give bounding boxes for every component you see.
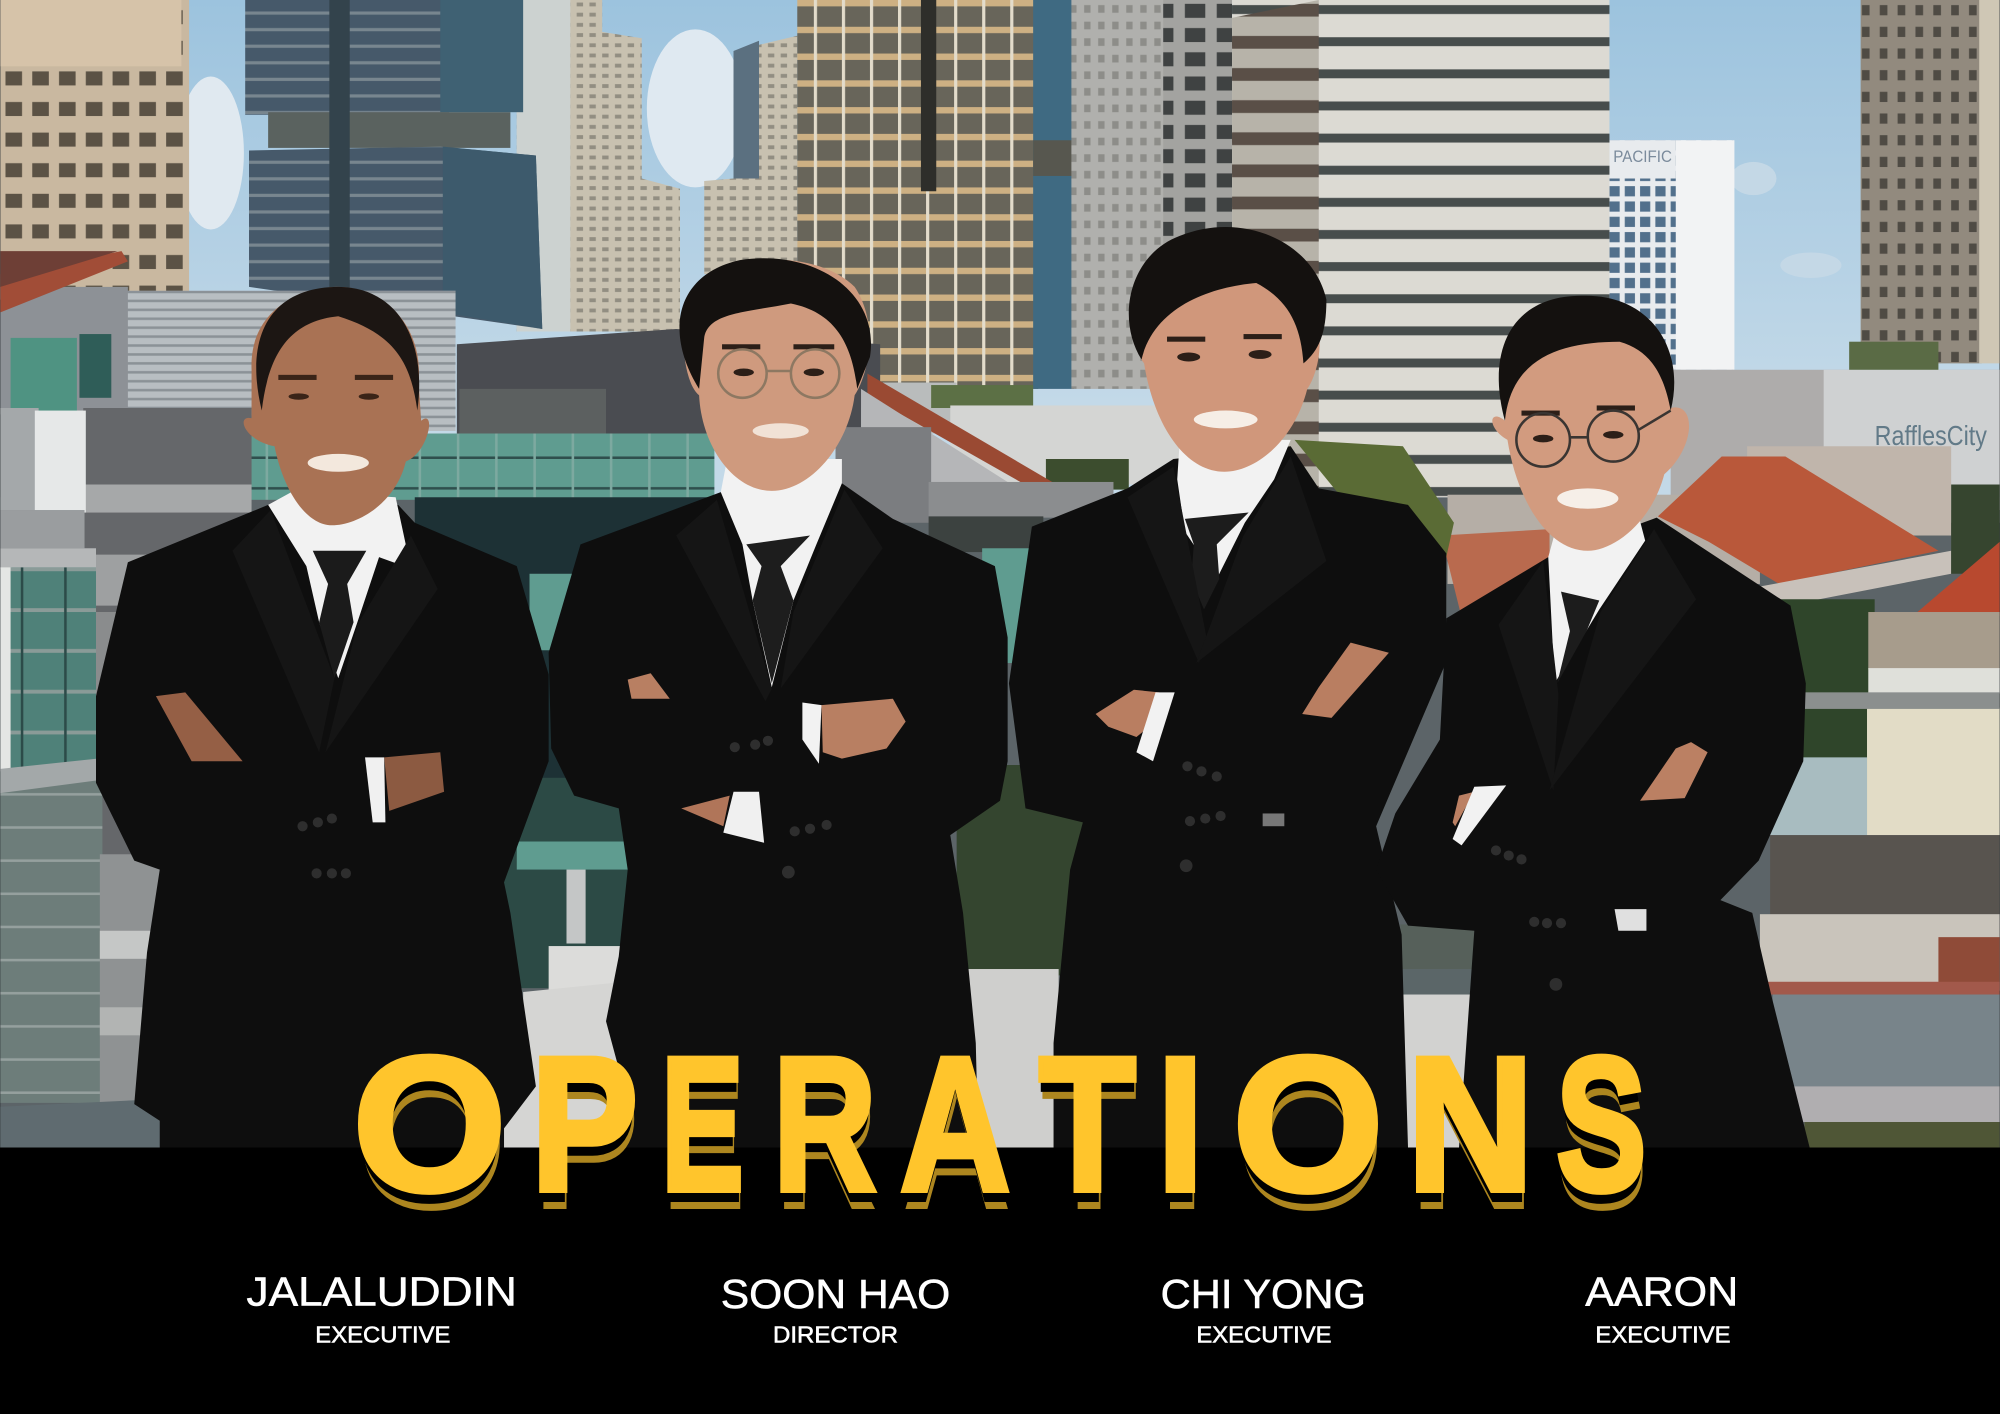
title: OPERATIONS: N <box>1406 1018 1533 1231</box>
sign: Pacific: PACIFIC <box>1613 147 1672 166</box>
caption: Jalaluddin, Executive: EXECUTIVE <box>315 1322 450 1348</box>
mid-ground buildings <box>0 251 2000 1148</box>
caption: Soon Hao, Director <box>721 1271 950 1348</box>
title: OPERATIONS: E <box>661 1018 744 1231</box>
face details <box>1167 334 1282 361</box>
caption: Chi Yong, Executive <box>1161 1271 1366 1348</box>
title: OPERATIONS: S <box>1556 1018 1646 1231</box>
face details <box>1521 405 1635 442</box>
title: OPERATIONS: O <box>352 1018 506 1231</box>
person: Jalaluddin <box>96 287 549 1148</box>
title: OPERATIONS: I <box>1157 1018 1204 1231</box>
title: OPERATIONS: A <box>900 1018 1010 1231</box>
title: OPERATIONS: P <box>531 1018 638 1231</box>
caption: Aaron, Executive <box>1585 1269 1738 1348</box>
glasses <box>718 349 839 398</box>
title: OPERATIONS: T <box>1039 1018 1136 1231</box>
caption: Aaron, Executive: AARON <box>1585 1269 1738 1315</box>
caption: Jalaluddin, Executive <box>246 1269 517 1348</box>
caption: Soon Hao, Director: DIRECTOR <box>773 1322 898 1348</box>
caption: Chi Yong, Executive: EXECUTIVE <box>1196 1322 1332 1348</box>
face details <box>278 375 393 400</box>
caption: Aaron, Executive: EXECUTIVE <box>1595 1322 1731 1348</box>
glasses <box>1516 411 1671 467</box>
title: OPERATIONS: R <box>773 1018 876 1231</box>
caption: Jalaluddin, Executive: JALALUDDIN <box>246 1269 517 1315</box>
person: Chi Yong <box>1009 227 1446 1148</box>
black caption band <box>0 1148 2000 1414</box>
face details <box>722 344 834 376</box>
person: Aaron <box>1376 296 1810 1148</box>
caption: Chi Yong, Executive: CHI YONG <box>1161 1271 1366 1317</box>
person: Soon Hao <box>549 258 1008 1148</box>
title: OPERATIONS: O <box>1233 1018 1383 1231</box>
caption: Soon Hao, Director: SOON HAO <box>721 1271 950 1317</box>
